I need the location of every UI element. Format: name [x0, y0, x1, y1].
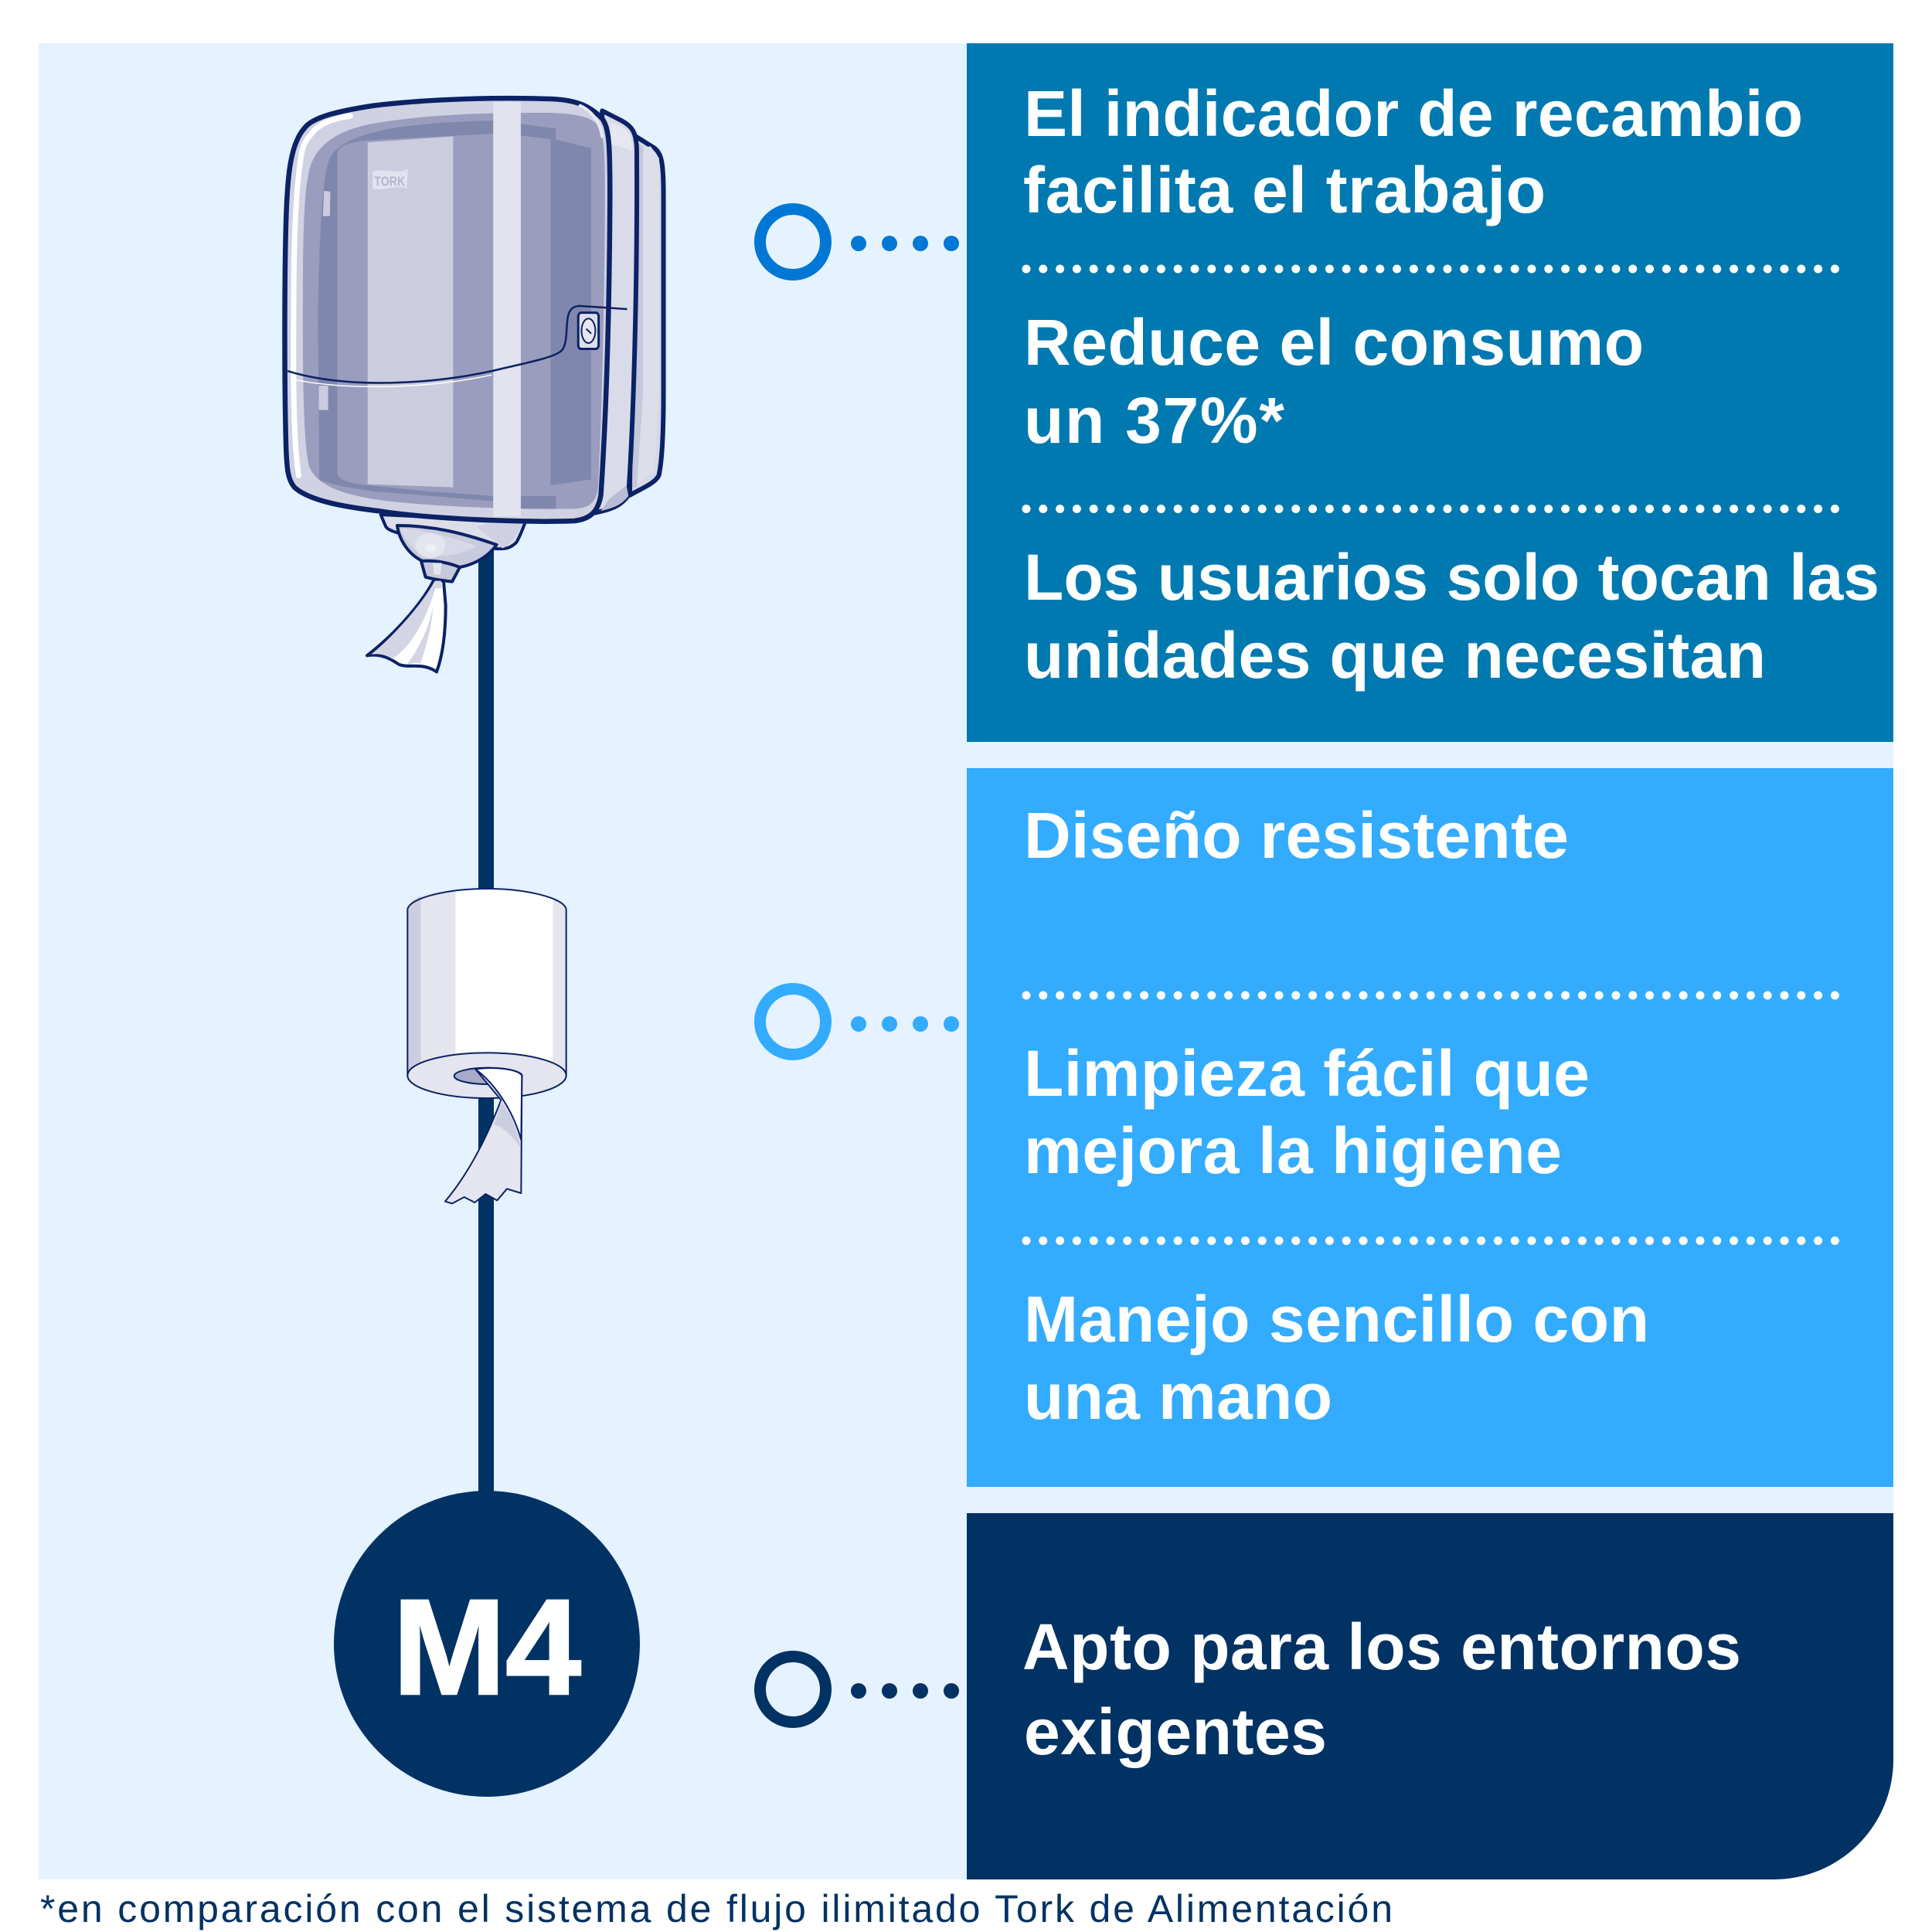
dispenser window [298, 109, 607, 515]
heading: entornos: Apto para los entornos [1022, 1611, 1741, 1683]
heading: manejo: Manejo sencillo con [1024, 1283, 1649, 1355]
dispenser nozzle [367, 515, 526, 672]
door seam [287, 306, 627, 383]
dispenser center strip [493, 102, 521, 516]
dispenser middle shell [594, 111, 637, 513]
heading: usuarios: Los usuarios solo tocan las [1024, 541, 1879, 614]
dispenser front body [284, 98, 610, 522]
dispenser highlight [294, 116, 350, 475]
tork logo: TORK [374, 174, 405, 189]
dispenser rear shell [630, 134, 664, 495]
text line: una mano: una mano [1024, 1360, 1332, 1433]
badge: M4 [334, 1491, 640, 1797]
lock [578, 313, 599, 349]
heading: consumo: Reduce el consumo [1024, 306, 1644, 379]
connector: ring and dots light blue [760, 989, 959, 1054]
vertical stem [478, 510, 494, 1515]
dispenser shells and body [284, 98, 664, 522]
heading: diseño: Diseño resistente [1024, 799, 1569, 872]
badge: M4: M4 [393, 1572, 581, 1723]
tork logo [372, 169, 408, 189]
text line: unidades: unidades que necesitan [1024, 619, 1766, 692]
text line: higiene: mejora la higiene [1024, 1114, 1562, 1187]
heading: limpieza: Limpieza fácil que [1024, 1037, 1590, 1110]
panel: features dark blue [967, 43, 1893, 742]
connector: ring and dots blue [760, 209, 959, 275]
roll base [407, 1053, 566, 1098]
connector: ring and dots navy [760, 1657, 959, 1722]
heading: recambio: El indicador de recambio [1024, 77, 1803, 150]
footnote: *en comparación con el sistema de flujo ilimitado Tork de Alimentación [40, 1887, 1393, 1930]
icon: paper roll [407, 889, 566, 1203]
roll core hole [454, 1068, 522, 1084]
icon: dispenser [284, 98, 664, 672]
text line: 37%: un 37%* [1024, 384, 1284, 457]
roll body [407, 889, 566, 1076]
panel: features light blue [967, 768, 1893, 1487]
panel: features navy [967, 1513, 1893, 1879]
roll sheet [445, 1068, 522, 1203]
text line: facilita: facilita el trabajo [1023, 154, 1546, 226]
text line: exigentes: exigentes [1024, 1696, 1327, 1768]
paper sheet [367, 580, 446, 672]
